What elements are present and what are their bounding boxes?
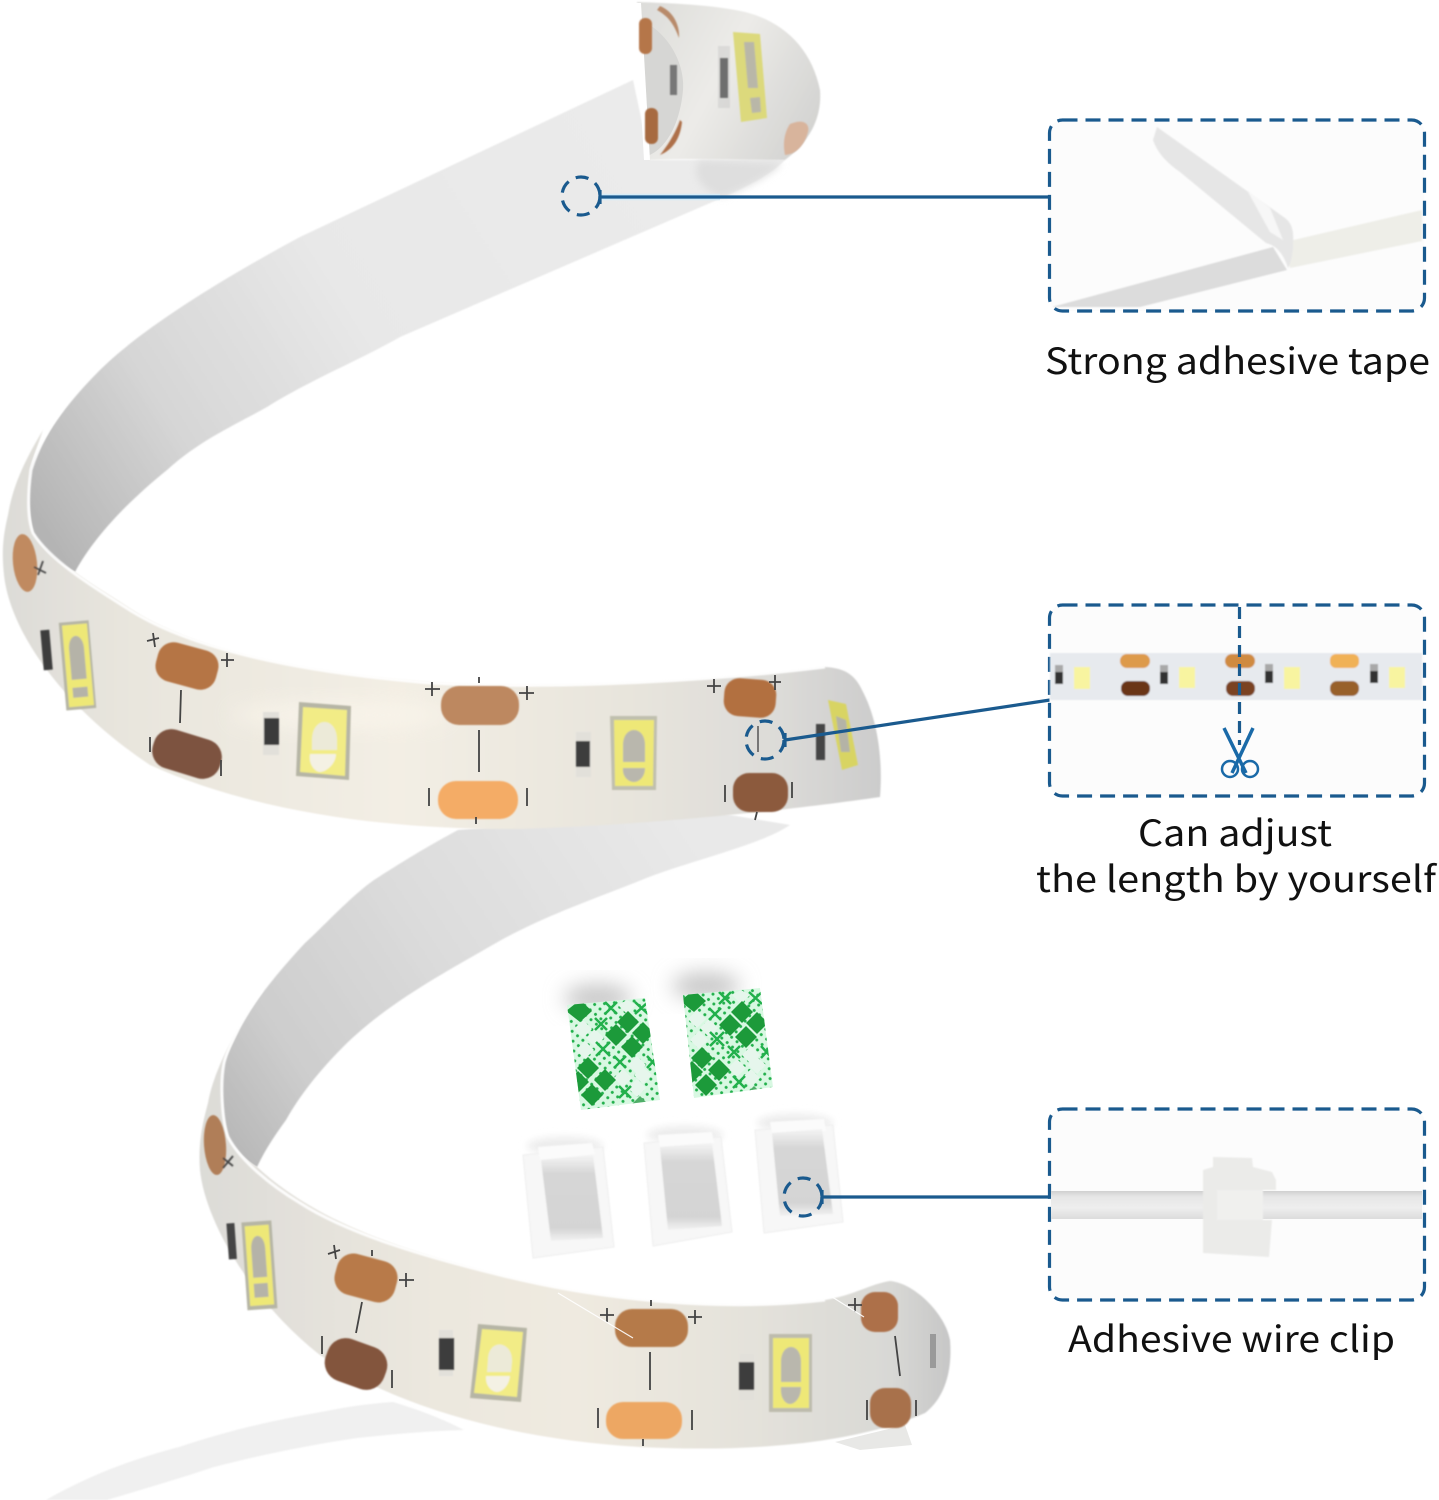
LED strip: lower back ribbon <box>221 810 790 1167</box>
flap highlight <box>1247 190 1283 240</box>
clip on wire <box>1203 1157 1276 1257</box>
panel: adhesive wire clip <box>1050 1109 1424 1300</box>
mounting tape squares <box>560 972 785 1120</box>
LED strip: upper front band <box>3 357 881 829</box>
LED strip: lower front band <box>199 990 950 1450</box>
LED module 4 <box>816 700 858 770</box>
connector: ring to cut panel <box>785 700 1050 747</box>
tape peeking under the end <box>835 1425 912 1450</box>
peeled flap <box>1153 127 1293 268</box>
LED strip photo <box>1050 653 1422 700</box>
solder pads 3 <box>707 675 792 820</box>
callout ring: cut mark <box>746 721 784 759</box>
panel: adjustable length <box>1050 605 1424 796</box>
soft shadow one <box>564 984 632 1012</box>
clip 1 <box>523 1137 614 1258</box>
label: strong adhesive tape: Strong adhesive tape <box>1045 333 1430 385</box>
pad group left edge <box>10 533 46 593</box>
scratch highlights <box>558 1293 864 1338</box>
connector: ring to tape panel <box>599 190 1050 204</box>
upper band lit highlight <box>230 701 450 729</box>
solder pads 1 <box>147 633 234 783</box>
solder pads 4 <box>319 1245 414 1395</box>
wire <box>1051 1191 1422 1219</box>
wire clips <box>523 1114 843 1258</box>
clip 2 <box>644 1126 732 1246</box>
LED module 5 <box>226 1220 277 1311</box>
solder pads 5 <box>598 1300 702 1446</box>
end pads <box>639 6 808 155</box>
white cut edge <box>635 3 650 160</box>
dashed cut line <box>1238 607 1241 745</box>
LED module 1 <box>40 620 96 712</box>
shade under top roll <box>696 160 782 197</box>
LED module 2 <box>263 702 351 780</box>
label: can adjust: Can adjust <box>1138 805 1332 857</box>
icon: scissors <box>1222 728 1258 777</box>
clip 3 <box>755 1114 843 1233</box>
end interior <box>640 20 683 156</box>
label: the length by yourself: the length by yourself <box>1036 851 1437 903</box>
LED module 6 <box>439 1324 527 1402</box>
callout ring: clip <box>784 1178 822 1216</box>
LED strip: upper back ribbon <box>29 80 785 572</box>
label: adhesive wire clip: Adhesive wire clip <box>1068 1311 1395 1363</box>
mounting square 1 <box>567 998 660 1110</box>
pad at left edge <box>202 1114 233 1176</box>
solder pads 6 <box>848 1292 936 1428</box>
soft shadow two <box>672 972 740 1000</box>
white cable <box>46 1402 464 1500</box>
LED module 3 <box>576 716 657 790</box>
mounting square 2 <box>683 988 773 1098</box>
tape strip <box>1052 127 1422 307</box>
connector: ring to clip panel <box>822 1190 1050 1204</box>
panel: adhesive tape <box>1050 120 1424 311</box>
LED strip: top rolled end <box>635 2 820 160</box>
LED module 7 <box>739 1334 812 1412</box>
callout ring: tape <box>562 177 600 215</box>
solder pads 2 <box>425 677 534 824</box>
lower band white rim <box>222 990 825 1305</box>
upper band white rim <box>29 357 825 685</box>
